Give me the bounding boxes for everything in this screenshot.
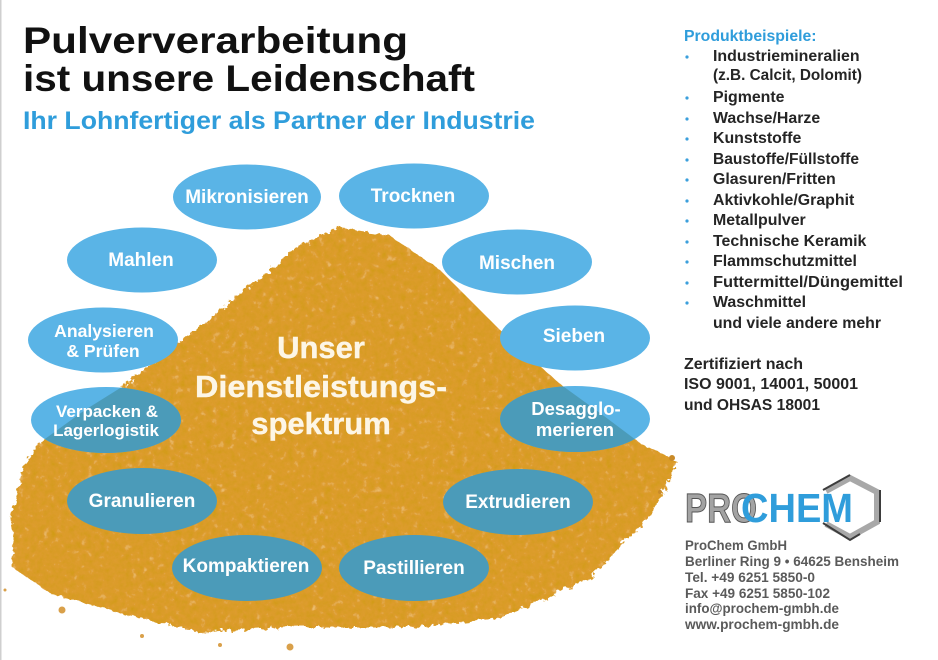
oval: Mahlen — [67, 228, 217, 292]
product list: Baustoffe/Füllstoffe — [713, 151, 859, 168]
oval: Granulieren — [67, 468, 217, 534]
center heading: Dienstleistungs- — [195, 369, 447, 404]
logo: ProChem: CHEM — [741, 485, 853, 531]
company address: Fax +49 6251 5850-102 — [685, 586, 830, 601]
oval: Verpacken & Lagerlogistik: Verpacken & — [56, 402, 158, 421]
logo: ProChem — [685, 475, 880, 540]
product list — [685, 48, 903, 332]
oval: Mahlen: Mahlen — [108, 250, 174, 271]
product list: Aktivkohle/Graphit — [713, 192, 855, 209]
company address — [684, 538, 899, 632]
oval: Sieben: Sieben — [543, 326, 605, 347]
oval: Analysieren & Prüfen: & Prüfen — [66, 341, 140, 361]
center heading: spektrum — [251, 406, 391, 441]
oval: Mischen: Mischen — [479, 253, 555, 274]
certification text — [684, 356, 858, 414]
oval: Trocknen — [339, 164, 489, 228]
oval: Pastillieren — [339, 535, 489, 601]
oval: Desagglomerieren — [500, 386, 650, 452]
oval: Mikronisieren — [173, 164, 321, 230]
company address: ProChem GmbH — [685, 538, 787, 553]
product list: und viele andere mehr — [713, 315, 881, 332]
company address: info@prochem-gmbh.de — [685, 601, 839, 616]
product list: Metallpulver — [713, 212, 806, 229]
subtitle: Ihr Lohnfertiger als Partner der Industrie — [23, 107, 535, 135]
oval: Granulieren: Granulieren — [89, 491, 195, 512]
center heading: Unser — [277, 330, 365, 365]
powder pile — [4, 227, 678, 650]
product list: Pigmente — [713, 89, 785, 106]
oval: Kompaktieren — [172, 535, 322, 601]
logo: ProChem: PRO — [685, 485, 757, 531]
product list: Kunststoffe — [713, 130, 801, 147]
oval: Trocknen: Trocknen — [371, 186, 455, 207]
certification text: ISO 9001, 14001, 50001 — [684, 376, 858, 393]
oval: Verpacken & Lagerlogistik: Lagerlogistik — [53, 421, 159, 440]
oval: Mikronisieren: Mikronisieren — [185, 187, 309, 208]
oval: Extrudieren: Extrudieren — [465, 492, 571, 513]
product list: Futtermittel/Düngemittel — [713, 274, 903, 291]
certification text: Zertifiziert nach — [684, 356, 803, 373]
product list: Flammschutzmittel — [713, 253, 857, 270]
oval: Mischen — [442, 230, 592, 294]
product list: Waschmittel — [713, 294, 806, 311]
oval: Verpacken & Lagerlogistik — [31, 387, 181, 453]
product list: Wachse/Harze — [713, 110, 820, 127]
product list: (z.B. Calcit, Dolomit) — [713, 67, 862, 84]
company address: www.prochem-gmbh.de — [684, 617, 839, 632]
certification text: und OHSAS 18001 — [684, 397, 820, 414]
company address: Tel. +49 6251 5850-0 — [685, 570, 815, 585]
oval: Analysieren & Prüfen: Analysieren — [54, 321, 154, 341]
product list: Technische Keramik — [713, 233, 867, 250]
product examples heading: Produktbeispiele: — [684, 28, 817, 45]
oval: Analysieren & Prüfen — [28, 308, 178, 372]
center heading — [195, 330, 447, 441]
oval: Desagglomerieren: Desagglo- — [531, 398, 621, 419]
oval: Pastillieren: Pastillieren — [363, 558, 465, 579]
oval: Kompaktieren: Kompaktieren — [183, 556, 309, 577]
product list: Glasuren/Fritten — [713, 171, 836, 188]
oval: Desagglomerieren: merieren — [536, 419, 614, 440]
title: Pulververarbeitung — [23, 20, 408, 61]
title — [23, 20, 475, 99]
product list: Industriemineralien — [713, 48, 860, 65]
company address: Berliner Ring 9 • 64625 Bensheim — [685, 554, 899, 569]
oval: Sieben — [500, 306, 650, 370]
title: ist unsere Leidenschaft — [23, 58, 475, 99]
oval: Extrudieren — [443, 469, 593, 535]
